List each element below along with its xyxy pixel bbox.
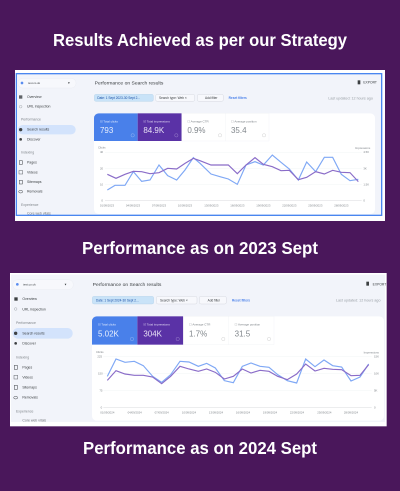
sidebar: Core web vitals xyxy=(22,419,46,423)
line chart: 0 xyxy=(101,199,103,203)
sidebar: Videos xyxy=(27,170,38,174)
sidebar: Pages xyxy=(27,160,37,164)
sidebar: Pages xyxy=(22,365,32,369)
sidebar: Discover xyxy=(27,137,41,141)
metric: total clicks: ☑ Total clicks xyxy=(98,323,116,327)
caption: 2023: Performance as on 2023 Sept xyxy=(82,238,318,258)
metric: total impressions: 304K xyxy=(143,330,163,339)
metric: average CTR xyxy=(182,113,226,141)
line chart: 20 xyxy=(100,166,104,170)
line chart: 28/09/2024 xyxy=(344,410,359,414)
metric: total clicks: 793 xyxy=(100,126,114,135)
metric: average position xyxy=(229,316,274,345)
sidebar: Experience xyxy=(16,410,33,414)
line chart: Impressions xyxy=(364,350,379,354)
line chart xyxy=(98,145,371,208)
line chart: 75 xyxy=(99,388,103,392)
line chart: 3K xyxy=(363,166,367,170)
line chart: Impressions xyxy=(355,146,371,150)
panel: September 2024 search results screenshot xyxy=(10,273,387,426)
sidebar: Indexing xyxy=(16,355,29,359)
chart card xyxy=(94,113,375,214)
sidebar: Performance xyxy=(16,321,36,325)
metric: average position: 35.4 xyxy=(231,126,247,135)
line chart: 16/09/2024 xyxy=(236,410,251,414)
filters: Search type: Web × xyxy=(160,298,188,302)
sidebar: Indexing xyxy=(21,151,34,155)
line chart: 10/09/2024 xyxy=(182,410,197,414)
sidebar: test.co.uk xyxy=(28,81,41,85)
sidebar: Search results xyxy=(22,331,45,335)
line chart: 25/09/2023 xyxy=(308,204,323,208)
metric: total impressions xyxy=(138,113,182,141)
line chart: 10K xyxy=(374,371,379,375)
sidebar: Sitemaps xyxy=(27,180,42,184)
sidebar: URL inspection xyxy=(27,105,51,109)
line chart: 150 xyxy=(98,371,103,375)
line chart: 04/09/2023 xyxy=(126,204,141,208)
line chart: 16/09/2023 xyxy=(230,204,245,208)
line chart: 10 xyxy=(100,182,104,186)
metric: average CTR: ☐ Average CTR xyxy=(187,119,210,123)
export and last updated: Last updated: 12 hours ago xyxy=(328,96,373,100)
line chart: 25/09/2024 xyxy=(317,410,332,414)
line chart: 22/09/2024 xyxy=(290,410,305,414)
line chart: 13/09/2023 xyxy=(204,204,219,208)
sidebar: Removals xyxy=(27,190,43,194)
line chart: 5K xyxy=(374,388,378,392)
sidebar: ▾ xyxy=(65,282,67,286)
panel: September 2023 search results screenshot xyxy=(15,70,385,221)
line chart: 15K xyxy=(374,354,379,358)
metric: average position: ☐ Average position xyxy=(235,323,261,327)
metric: total clicks xyxy=(92,316,137,345)
metric: average CTR: ☐ Average CTR xyxy=(189,323,211,327)
metric: total impressions xyxy=(137,316,183,345)
sidebar: Experience xyxy=(21,203,38,207)
line chart: 13/09/2024 xyxy=(209,410,224,414)
metric: average CTR: 1.7% xyxy=(189,330,207,339)
line chart: 07/09/2023 xyxy=(152,204,167,208)
line chart: 28/09/2023 xyxy=(334,204,349,208)
sidebar: Performance xyxy=(21,118,41,122)
export and last updated: EXPORT xyxy=(363,81,377,85)
line chart: Clicks xyxy=(98,145,106,149)
line chart: 0 xyxy=(363,199,365,203)
export and last updated xyxy=(328,80,377,100)
metric: total impressions: ☑ Total impressions xyxy=(143,323,170,327)
filters: Date: 1 Sept 2024-30 Sept 2... xyxy=(96,298,139,302)
sidebar: test.co.uk xyxy=(23,282,36,286)
line chart xyxy=(96,350,379,414)
metric: total clicks xyxy=(94,113,138,141)
sidebar: Sitemaps xyxy=(22,386,37,390)
line chart: Clicks xyxy=(96,350,104,354)
metric: total clicks: 5.02K xyxy=(98,330,120,339)
heading: Performance on Search results xyxy=(95,81,164,87)
metric: average position: 31.5 xyxy=(235,330,251,339)
filters: Add filter xyxy=(205,96,217,100)
line chart: 19/09/2023 xyxy=(256,204,271,208)
export and last updated: Last updated: 12 hours ago xyxy=(336,299,381,303)
metric: total clicks: ☑ Total clicks xyxy=(100,119,118,123)
sidebar xyxy=(18,78,76,216)
filters xyxy=(94,94,247,101)
sidebar: Overview xyxy=(22,297,37,301)
chart card xyxy=(92,316,384,421)
metric: average CTR: 0.9% xyxy=(187,126,206,135)
sidebar: Removals xyxy=(22,396,38,400)
line chart: 0 xyxy=(374,405,376,409)
metric: total impressions: ☑ Total impressions xyxy=(143,119,170,123)
metric: average position xyxy=(226,113,269,141)
filters: Reset filters xyxy=(229,96,247,100)
title: Results Achieved as per our Strategy xyxy=(53,30,347,50)
line chart: 01/09/2024 xyxy=(100,410,115,414)
metric: total impressions: 84.9K xyxy=(143,126,165,135)
line chart: 07/09/2024 xyxy=(155,410,169,414)
caption: 2024: Performance as on 2024 Sept xyxy=(83,438,317,458)
export and last updated xyxy=(336,282,386,303)
filters: Search type: Web × xyxy=(159,96,187,100)
line chart: 04/09/2024 xyxy=(128,410,142,414)
filters: Reset filters xyxy=(232,298,250,302)
sidebar: Discover xyxy=(22,341,37,345)
line chart: 4.5K xyxy=(363,150,369,154)
metric: average CTR xyxy=(183,316,229,345)
sidebar: Overview xyxy=(27,95,42,99)
line chart: 01/09/2023 xyxy=(100,204,115,208)
line chart: 40 xyxy=(100,150,104,154)
filters: Date: 1 Sept 2023-30 Sept 2... xyxy=(97,96,140,100)
line chart: 0 xyxy=(101,405,103,409)
export and last updated: EXPORT xyxy=(373,282,386,286)
heading: Performance on Search results xyxy=(93,282,162,288)
sidebar: Search results xyxy=(27,128,50,132)
line chart: 225 xyxy=(97,354,102,358)
filters xyxy=(92,296,250,304)
line chart: 22/09/2023 xyxy=(282,204,297,208)
line chart: 19/09/2024 xyxy=(263,410,278,414)
sidebar: ▾ xyxy=(68,81,70,85)
metric: average position: ☐ Average position xyxy=(231,119,257,123)
sidebar: Videos xyxy=(22,375,33,379)
line chart: 1.5K xyxy=(363,182,369,186)
sidebar: URL inspection xyxy=(22,307,46,311)
filters: Add filter xyxy=(208,298,220,302)
sidebar xyxy=(13,280,73,423)
sidebar: Core web vitals xyxy=(27,212,51,216)
line chart: 10/09/2023 xyxy=(178,204,193,208)
